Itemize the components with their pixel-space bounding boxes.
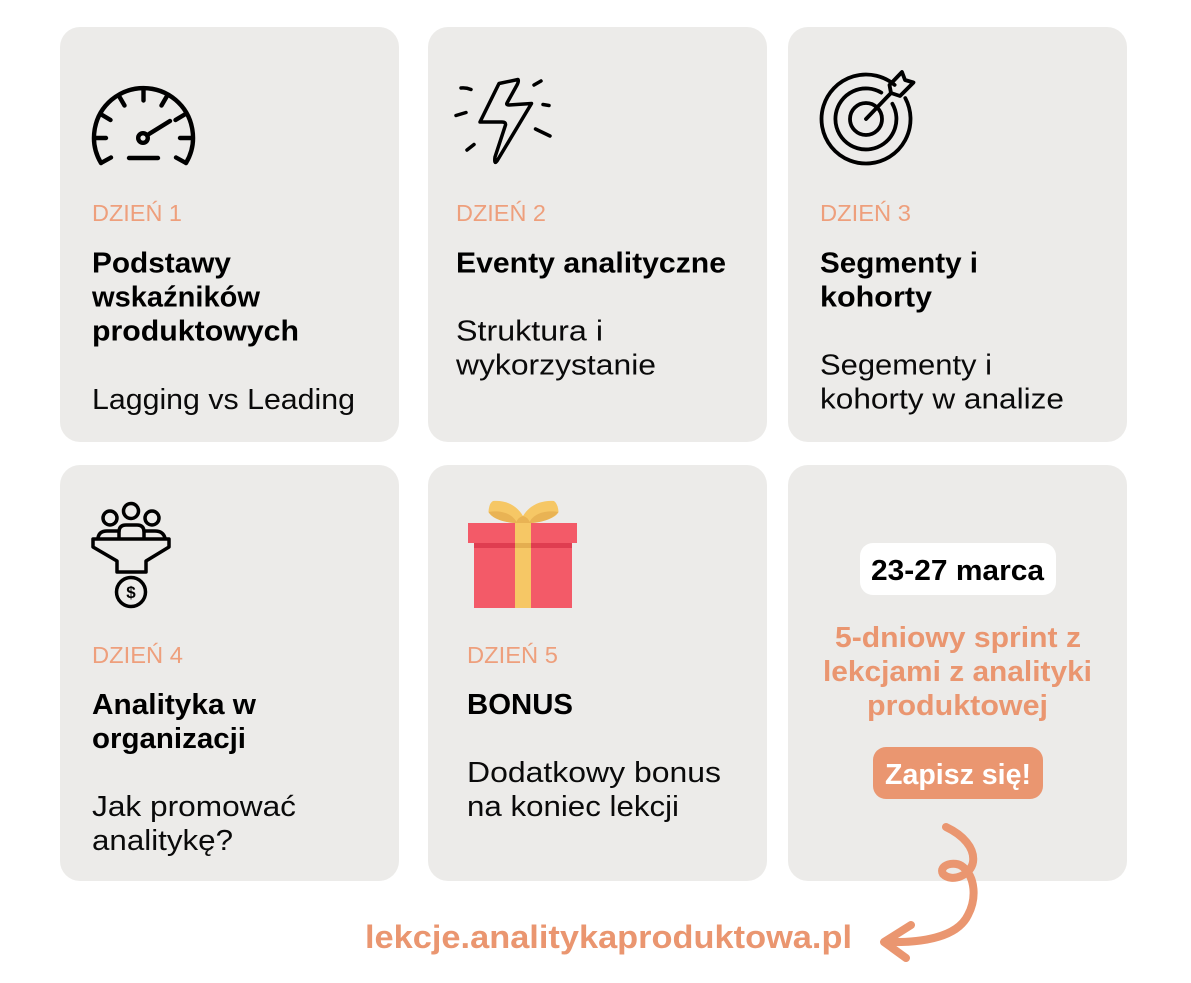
text: sprint description bbox=[823, 622, 1092, 722]
button: sign up bbox=[873, 747, 1043, 799]
icon: gift box bbox=[468, 501, 577, 608]
text: day 4 description: Jak promować bbox=[92, 791, 296, 823]
date pill bbox=[860, 543, 1056, 595]
panel: day 4 bbox=[60, 465, 399, 881]
text: day 5 description: na koniec lekcji bbox=[467, 791, 679, 823]
panel: sprint call to action bbox=[788, 465, 1127, 881]
text: day 5 description bbox=[467, 757, 721, 823]
text: day 3 description: kohorty w analize bbox=[820, 384, 1064, 416]
heading: day 4: Analityka w bbox=[92, 689, 256, 721]
link: website url: lekcje.analitykaproduktowa.pl bbox=[365, 919, 852, 955]
heading: day 1: wskaźników bbox=[91, 282, 260, 314]
heading: day 4 bbox=[92, 689, 256, 755]
icon: target with arrow bbox=[822, 72, 914, 164]
icon: speedometer bbox=[94, 88, 193, 163]
text: day 1 description: Lagging vs Leading bbox=[92, 384, 355, 416]
text: day 3 description bbox=[820, 350, 1064, 416]
text: sprint description: lekcjami z analityki bbox=[823, 656, 1092, 688]
text: day 2 description bbox=[455, 316, 656, 382]
label: day 3: DZIEŃ 3 bbox=[820, 200, 911, 226]
heading: day 5: BONUS bbox=[467, 689, 573, 721]
panel: day 3 bbox=[788, 27, 1127, 442]
label: day 5: DZIEŃ 5 bbox=[467, 642, 558, 668]
heading: day 3 bbox=[820, 248, 978, 314]
icon: people funnel with coin bbox=[93, 504, 169, 606]
text: day 2 description: wykorzystanie bbox=[455, 350, 656, 382]
panel: day 5 bbox=[428, 465, 767, 881]
icon: lightning bolt bbox=[456, 80, 550, 162]
panel: day 2 bbox=[428, 27, 767, 442]
text: day 5 description: Dodatkowy bonus bbox=[467, 757, 721, 789]
label: day 2: DZIEŃ 2 bbox=[456, 200, 546, 226]
text: day 3 description: Segementy i bbox=[820, 350, 992, 382]
label: day 1: DZIEŃ 1 bbox=[92, 200, 182, 226]
heading: day 1: Podstawy bbox=[92, 248, 231, 280]
text: sprint description: 5-dniowy sprint z bbox=[835, 622, 1081, 654]
heading: day 1 bbox=[91, 248, 299, 348]
heading: day 3: kohorty bbox=[820, 282, 932, 314]
panel: day 1 bbox=[60, 27, 399, 442]
button: sign up: Zapisz się! bbox=[885, 759, 1031, 791]
arrow: curly arrow to link bbox=[884, 827, 974, 958]
label: day 4: DZIEŃ 4 bbox=[92, 642, 183, 668]
text: sprint description: produktowej bbox=[867, 690, 1048, 722]
heading: day 1: produktowych bbox=[92, 316, 299, 348]
heading: day 3: Segmenty i bbox=[820, 248, 978, 280]
heading: day 2: Eventy analityczne bbox=[456, 248, 726, 280]
text: day 4 description: analitykę? bbox=[92, 825, 233, 857]
text: day 2 description: Struktura i bbox=[456, 316, 603, 348]
icon: dollar sign: $ bbox=[126, 583, 136, 602]
date pill: 23-27 marca bbox=[871, 555, 1045, 587]
text: day 4 description bbox=[92, 791, 296, 857]
heading: day 4: organizacji bbox=[92, 723, 246, 755]
